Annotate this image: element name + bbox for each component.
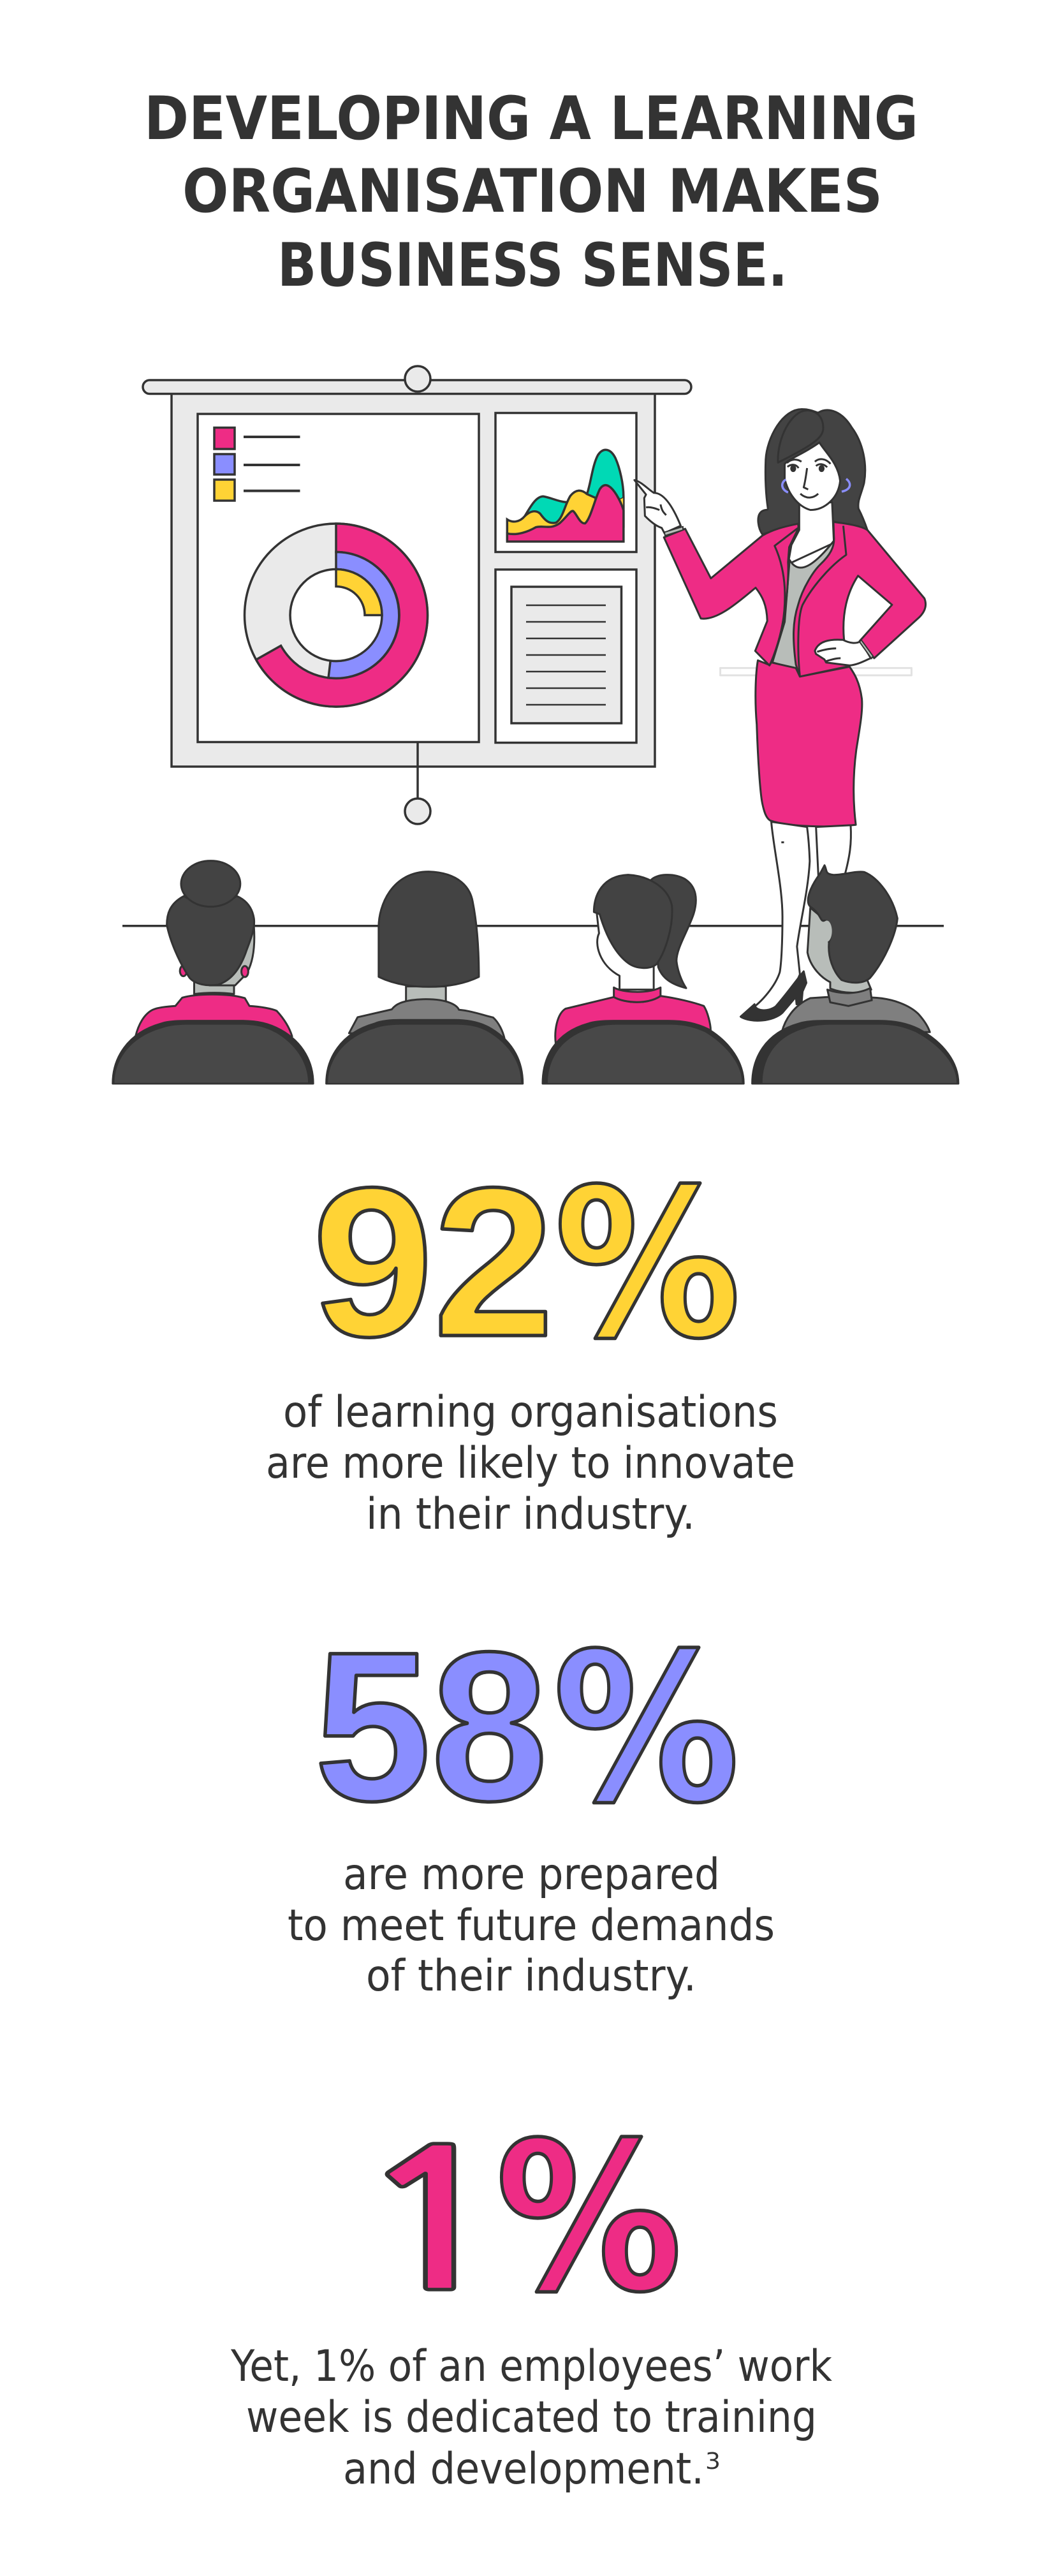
pointing hand [634, 480, 680, 533]
area chart shapes [507, 450, 624, 541]
left leg [741, 822, 810, 1020]
whiteboard behind presenter [721, 668, 911, 675]
seat 2 [326, 1020, 523, 1084]
description 1%: Yet, 1% of an employees’ work [230, 2341, 833, 2392]
pointing cuff [664, 527, 683, 536]
big number 92% [312, 1144, 741, 1384]
panel: area chart [495, 413, 636, 552]
description 92% [266, 1387, 795, 1540]
title: BUSINESS SENSE. [277, 231, 788, 300]
seat 4 [752, 1021, 958, 1084]
description 58%: are more prepared [343, 1850, 720, 1900]
description 92%: are more likely to innovate [266, 1438, 795, 1489]
seat 1 [113, 1021, 313, 1084]
panel: document [495, 570, 636, 742]
skirt [756, 660, 862, 827]
earrings [782, 479, 850, 492]
title: ORGANISATION MAKES [182, 157, 883, 226]
presenter [634, 409, 926, 1020]
big number 92%: 92 [312, 1144, 554, 1381]
description 58%: to meet future demands [288, 1901, 775, 1951]
seat 3 [543, 1021, 744, 1084]
big number 58% [314, 1608, 740, 1848]
neck [788, 503, 834, 564]
hip cuff [860, 640, 873, 659]
panel: donut chart [198, 414, 479, 742]
screen frame [172, 394, 655, 767]
description 1% [230, 2341, 833, 2494]
stat: 92% [266, 1144, 795, 1540]
big number 1% [353, 2098, 682, 2337]
pull cord [416, 742, 419, 799]
stat: 1% [230, 2098, 833, 2494]
big number 1%: 1 [353, 2128, 514, 2318]
jacket left side and pointing arm [664, 524, 798, 665]
floor line [122, 925, 944, 927]
legend [214, 427, 300, 501]
screen roller [143, 380, 691, 394]
person 1: woman with bun [136, 861, 292, 1036]
description 1%: 3 [705, 2448, 721, 2475]
shoe [740, 971, 807, 1020]
jacket right side and arm on hip [794, 522, 926, 677]
description 92%: of learning organisations [283, 1387, 778, 1438]
big number 92%: % [554, 1145, 741, 1384]
description 58% [288, 1850, 775, 2001]
big number 58%: % [553, 1609, 740, 1848]
description 1%: and development. [343, 2444, 704, 2494]
seats [113, 1020, 958, 1084]
hair back [758, 409, 867, 534]
knee mark [781, 841, 784, 843]
description 92%: in their industry. [366, 1489, 695, 1540]
bottom knob [405, 799, 430, 824]
hand details [646, 504, 666, 515]
title: DEVELOPING A LEARNING [144, 84, 918, 154]
top knob [405, 366, 430, 392]
right lapel [798, 526, 846, 677]
stat: 58% [288, 1608, 775, 2001]
person 3: ponytail [555, 875, 710, 1044]
illustration: presentation scene [113, 366, 958, 1084]
facial features [787, 459, 830, 497]
person 2: short hair [349, 872, 504, 1038]
projector screen [143, 366, 691, 824]
finger lines [817, 649, 840, 661]
top [772, 541, 834, 669]
donut [245, 524, 427, 707]
right leg [816, 825, 851, 883]
description 58%: of their industry. [366, 1951, 696, 2001]
front hair [778, 411, 823, 462]
person 4: man [782, 865, 930, 1032]
big number 1%: % [495, 2098, 682, 2337]
big number 58%: 58 [314, 1608, 548, 1845]
title [144, 84, 918, 300]
hand on hip [815, 640, 871, 665]
face [785, 443, 840, 510]
description 1%: week is dedicated to training [246, 2392, 817, 2443]
audience [113, 861, 958, 1084]
left lapel [770, 528, 798, 665]
